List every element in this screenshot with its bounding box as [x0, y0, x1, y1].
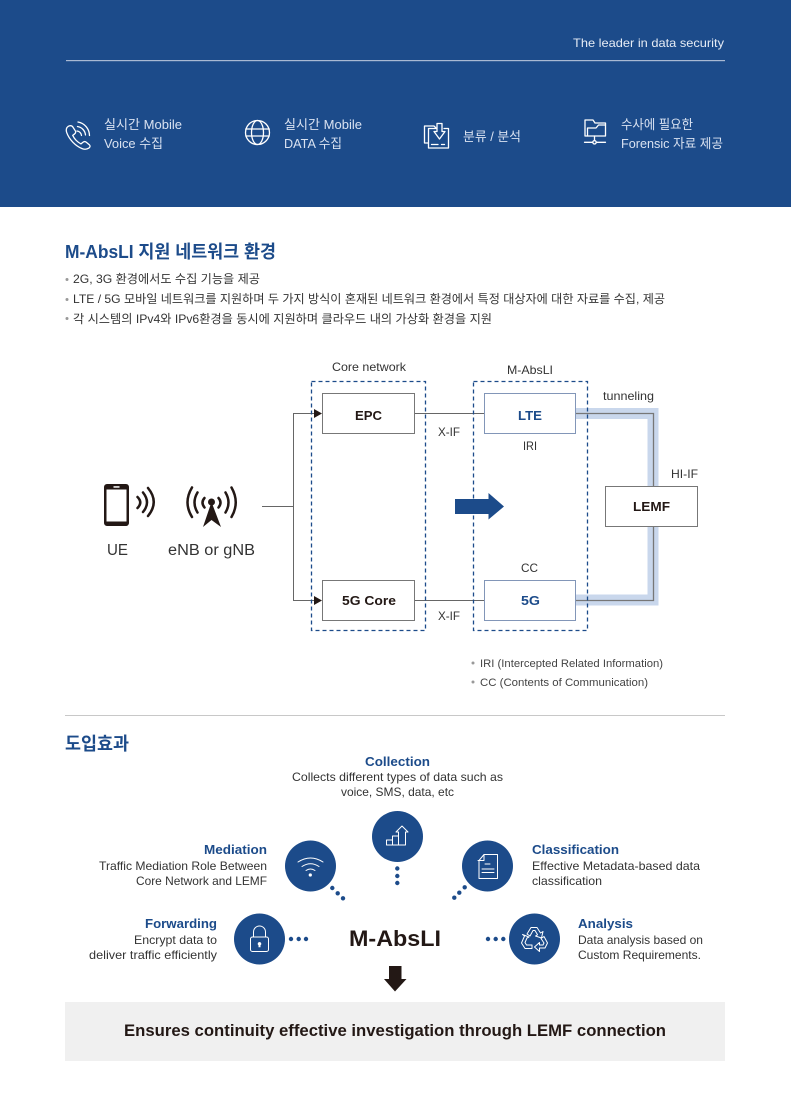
box: EPC: EPC — [355, 408, 383, 423]
text: forwarding: Encrypt data to — [134, 933, 217, 947]
feature: voice — [66, 117, 182, 151]
bullet list: LTE / 5G 모바일 네트워크를 지원하며 두 가지 방식이 혼재된 네트워크 환경에서 특정 대상자에 대한 자료를 수집, 제공 — [73, 292, 665, 306]
label: classify: 분류 / 분석 — [463, 129, 521, 144]
node: analysis — [486, 914, 560, 964]
text: analysis — [578, 916, 703, 962]
text: analysis: Analysis — [578, 916, 633, 931]
text: analysis: Custom Requirements. — [578, 948, 701, 962]
bullet list: 2G, 3G 환경에서도 수집 기능을 제공 — [73, 272, 260, 286]
box: 5G — [484, 580, 576, 620]
label: data: 실시간 Mobile — [284, 117, 362, 132]
icon: folder download — [424, 124, 448, 148]
node: classification — [452, 840, 513, 900]
box: LTE: LTE — [518, 408, 542, 423]
text: collection: voice, SMS, data, etc — [341, 785, 454, 799]
box: LTE — [484, 394, 576, 434]
tunnel band — [576, 414, 653, 600]
box: 5G Core: 5G Core — [342, 593, 396, 608]
node: forwarding — [234, 914, 308, 964]
text: collection: Collection — [365, 754, 430, 769]
group labels: CC — [521, 561, 538, 575]
text: mediation: Traffic Mediation Role Between — [99, 859, 267, 873]
heading: effects: 도입효과 — [65, 734, 129, 754]
text: forwarding: Forwarding — [145, 916, 217, 931]
text: mediation: Core Network and LEMF — [136, 874, 267, 888]
bullet list: 각 시스템의 IPv4와 IPv6환경을 동시에 지원하며 클라우드 내의 가상화 환경을 지원 — [73, 312, 492, 326]
icon: UE phone — [104, 484, 154, 526]
network diagram — [104, 360, 698, 689]
arrow: down — [384, 966, 406, 992]
legend notes — [472, 658, 663, 689]
label: forensic: Forensic 자료 제공 — [621, 136, 723, 151]
feature: data — [246, 117, 362, 151]
group labels: HI-IF — [671, 467, 698, 481]
text: classification — [532, 842, 700, 888]
group labels: M-AbsLI — [507, 363, 553, 377]
label: voice: Voice 수집 — [104, 136, 163, 151]
box: LEMF — [606, 486, 698, 526]
box: EPC — [322, 394, 414, 434]
arrow: blue flow — [455, 493, 504, 520]
group labels: X-IF — [438, 609, 460, 623]
text: mediation: Mediation — [204, 842, 267, 857]
group labels: Core network — [332, 360, 407, 374]
text: analysis: Data analysis based on — [578, 933, 703, 947]
text: mediation — [99, 842, 267, 888]
icon: globe — [246, 120, 270, 144]
icon: antenna — [188, 488, 236, 527]
text: classification: classification — [532, 874, 602, 888]
icon: network folder — [584, 120, 606, 144]
text: forwarding: deliver traffic efficiently — [89, 948, 217, 962]
tagline: The leader in data security — [573, 36, 724, 50]
text: classification: Effective Metadata-based data — [532, 859, 700, 873]
text: collection — [292, 754, 503, 799]
m-absli group — [474, 382, 588, 630]
core network group — [312, 382, 426, 630]
feature: classify — [424, 124, 521, 148]
legend notes: IRI (Intercepted Related Information) — [480, 658, 663, 670]
box: 5G: 5G — [521, 593, 540, 608]
conclusion banner: Ensures continuity effective investigation through LEMF connection — [124, 1021, 666, 1040]
header band — [0, 0, 791, 207]
label: voice — [104, 117, 182, 151]
group labels — [332, 360, 698, 623]
group labels: IRI — [523, 439, 537, 453]
label: data — [284, 117, 362, 151]
feature: forensic — [584, 117, 723, 151]
label: eNB or gNB: eNB or gNB — [168, 542, 255, 559]
text: classification: Classification — [532, 842, 619, 857]
connector lines — [262, 409, 654, 605]
box: LEMF: LEMF — [633, 499, 670, 514]
effects diagram — [89, 754, 703, 992]
label: forensic — [621, 117, 723, 151]
conclusion banner — [65, 1002, 725, 1061]
node: collection — [372, 811, 423, 885]
text: forwarding — [89, 916, 217, 962]
label: forensic: 수사에 필요한 — [621, 117, 693, 132]
legend notes: CC (Contents of Communication) — [480, 677, 648, 689]
heading: network environment: M-AbsLI 지원 네트워크 환경 — [65, 242, 276, 262]
label: data: DATA 수집 — [284, 136, 342, 151]
text: collection: Collects different types of data such as — [292, 770, 503, 784]
node: mediation — [285, 840, 345, 900]
group labels: X-IF — [438, 425, 460, 439]
group labels: tunneling — [603, 389, 654, 403]
icon: phone — [66, 122, 90, 149]
bullet list — [66, 272, 665, 326]
label: UE: UE — [107, 542, 128, 559]
center label: M-AbsLI — [349, 926, 441, 951]
box: 5G Core — [322, 580, 414, 620]
label: voice: 실시간 Mobile — [104, 117, 182, 132]
